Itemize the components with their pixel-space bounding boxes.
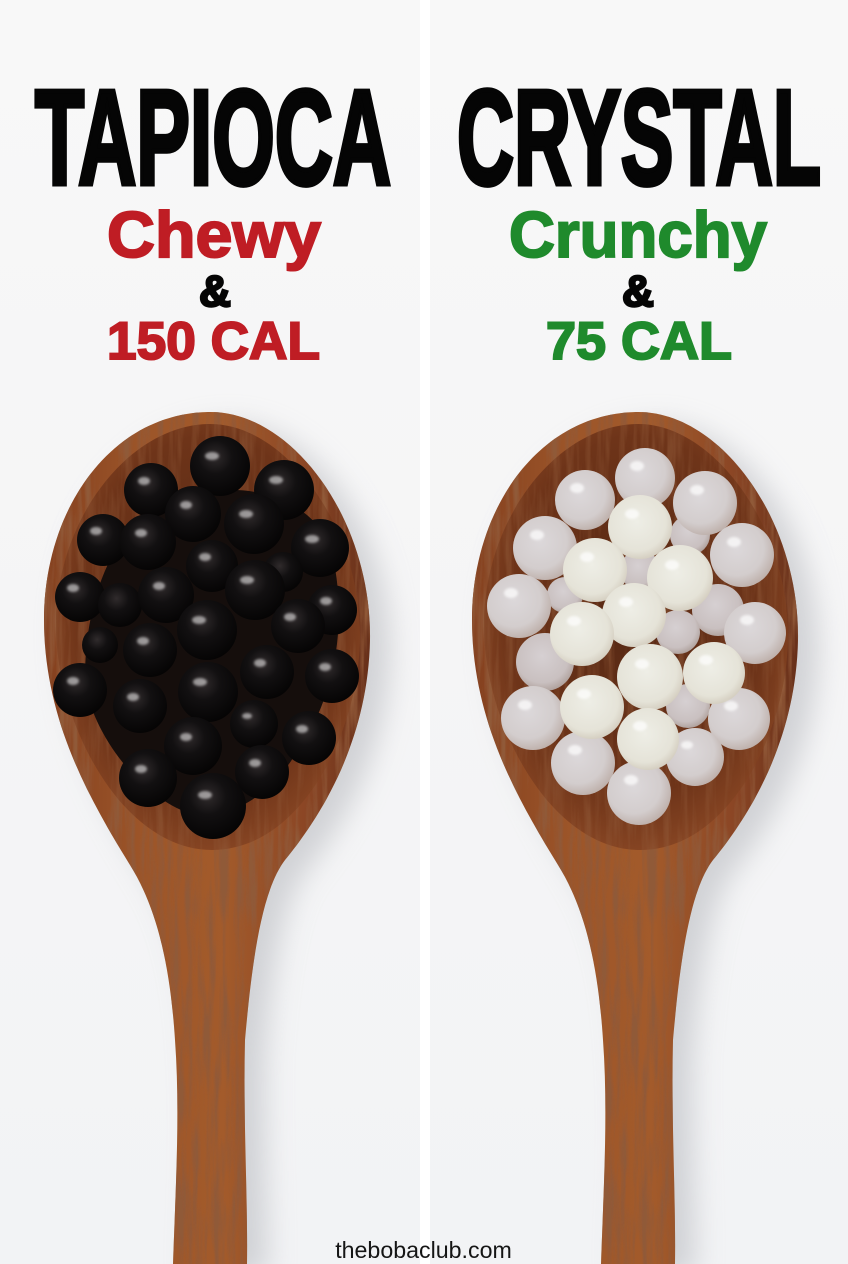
crystal pearls xyxy=(487,448,786,825)
footer: website: thebobaclub.com xyxy=(335,1237,512,1263)
ampersand: crystal: & xyxy=(622,267,654,316)
label: Chewy: Chewy xyxy=(107,198,321,271)
label: 150 CAL: 150 CAL xyxy=(107,312,320,371)
panel: crystal xyxy=(430,215,848,1264)
spoon shadow: crystal xyxy=(664,414,828,1264)
spoon shadow: tapioca xyxy=(236,414,400,1264)
ampersand: tapioca: & xyxy=(199,267,231,316)
panel: tapioca xyxy=(0,215,420,1264)
spoon: tapioca xyxy=(44,412,370,1264)
label: Crunchy: Crunchy xyxy=(509,198,767,271)
tapioca pearls xyxy=(53,436,359,839)
spoon: crystal xyxy=(472,412,798,1264)
heading: TAPIOCA: TAPIOCA xyxy=(35,62,391,213)
label: 75 CAL: 75 CAL xyxy=(546,312,732,371)
